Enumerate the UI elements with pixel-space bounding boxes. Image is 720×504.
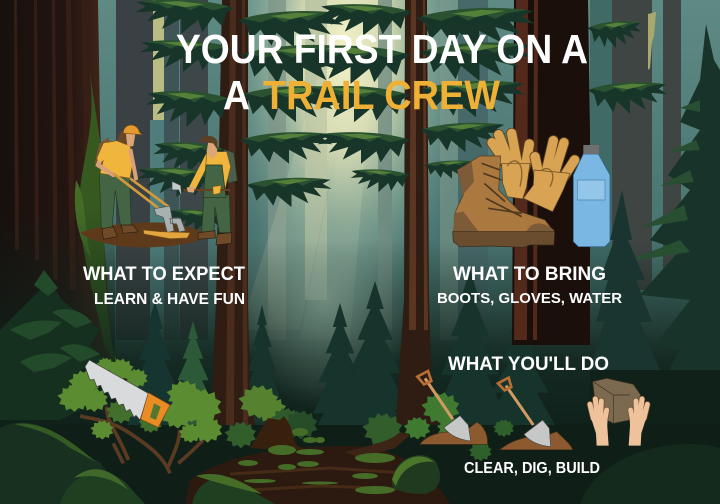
- what to expect label: [83, 264, 245, 308]
- moss patches: [238, 428, 395, 494]
- title: YOUR FIRST DAY ON A: [176, 26, 588, 72]
- what you'll do heading: WHAT YOU'LL DO: [448, 354, 609, 375]
- light bush behind trunk: [238, 385, 317, 439]
- distant trunks: [116, 0, 681, 340]
- what to bring label: WHAT TO BRING: [453, 264, 606, 285]
- worker with pulaski: [172, 136, 237, 245]
- what to bring label: [437, 264, 622, 307]
- water bottle: [573, 145, 610, 247]
- left glove: [492, 133, 530, 199]
- clear dig build label: CLEAR, DIG, BUILD: [464, 460, 600, 477]
- icon: boots, gloves, water bottle: [453, 133, 610, 247]
- title: [176, 26, 588, 118]
- boot: [453, 156, 555, 247]
- right side fir trees: [590, 24, 720, 504]
- left young fir foliage: [0, 270, 108, 420]
- center trunk: [345, 0, 440, 452]
- fir branches: [135, 0, 667, 232]
- mid distance small firs: [117, 269, 566, 469]
- title: A: [223, 72, 250, 118]
- worker with helmet: [95, 125, 142, 239]
- right big trunk: [512, 0, 590, 345]
- second shovel: [498, 378, 573, 450]
- stump: [250, 416, 310, 452]
- ground patch: [80, 222, 205, 247]
- icon: shovels and soil: [404, 371, 647, 461]
- forest floor and moss: [0, 385, 720, 504]
- what to expect label: LEARN & HAVE FUN: [94, 291, 245, 308]
- first shovel: [417, 371, 487, 444]
- icon: saw on bush: [57, 358, 222, 473]
- title: TRAIL CREW: [263, 72, 500, 118]
- saw handle: [141, 393, 170, 427]
- moss boulders: [392, 455, 440, 494]
- dirt path: [185, 446, 450, 504]
- what to expect label: WHAT TO EXPECT: [83, 264, 245, 285]
- bush: [57, 358, 222, 473]
- what to bring label: BOOTS, GLOVES, WATER: [437, 290, 622, 307]
- tool: tamper: [113, 173, 190, 239]
- right glove: [523, 141, 575, 212]
- big left tree trunk: [0, 0, 128, 400]
- moss behind shovels: [404, 392, 514, 461]
- center-left trunk: [206, 0, 256, 428]
- icon: trail crew workers: [80, 125, 237, 247]
- rock and hands: [590, 378, 647, 446]
- saw blade: [85, 360, 148, 420]
- light rays: [240, 70, 372, 340]
